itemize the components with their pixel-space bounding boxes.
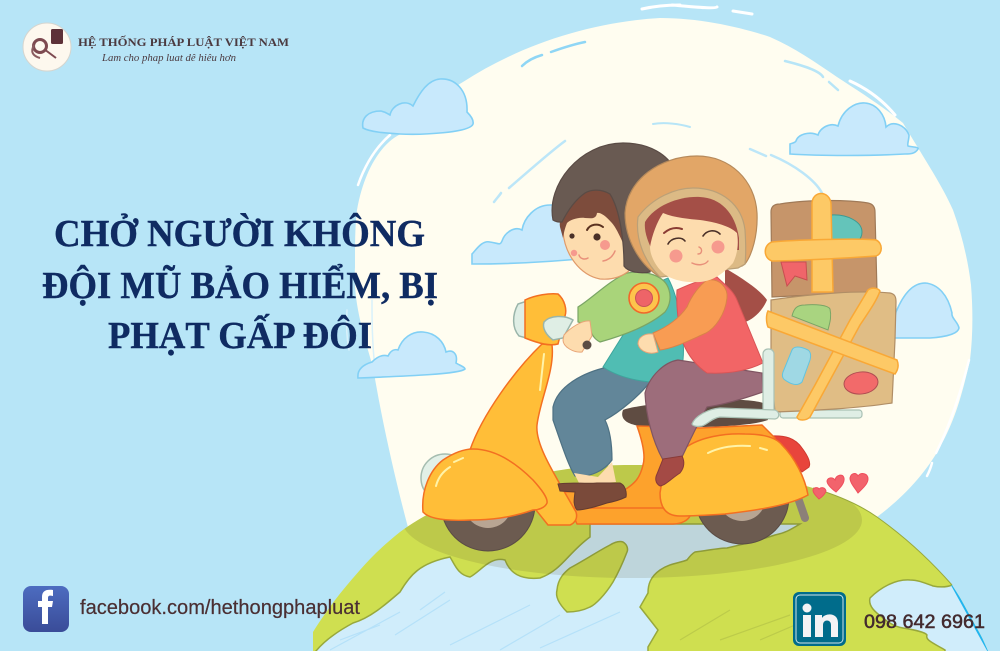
box rail — [780, 410, 862, 418]
title: PHẠT GẤP ĐÔI — [108, 314, 372, 357]
hair — [560, 186, 624, 245]
boot — [656, 456, 684, 486]
seat — [622, 400, 768, 427]
bottom box — [766, 288, 898, 420]
cloud: behind boxes — [890, 283, 959, 338]
eyes and mouth — [664, 228, 724, 265]
globe — [313, 465, 988, 651]
logo text — [78, 34, 289, 64]
jeans — [553, 367, 650, 476]
scooter front wheel — [441, 457, 535, 551]
male rider — [543, 143, 683, 510]
female rider — [625, 156, 763, 486]
scooter rear wheel — [695, 450, 789, 544]
logo badge — [23, 23, 71, 71]
cloud: behind rider — [472, 205, 590, 264]
title: CHỞ NGƯỜI KHÔNG — [54, 212, 425, 255]
cloud: lower left — [358, 332, 465, 378]
front mudguard — [421, 454, 469, 502]
headlight — [514, 294, 566, 345]
scooter highlights — [436, 354, 767, 486]
face — [650, 213, 738, 282]
logo text: Lam cho phap luat dê hiêu hơn — [101, 53, 236, 64]
green sleeve — [578, 272, 670, 342]
vest — [677, 277, 763, 373]
icon: linkedin — [793, 592, 846, 646]
scooter mid body — [563, 425, 775, 524]
moon — [355, 18, 972, 570]
scooter stand — [797, 495, 805, 518]
sleeve — [653, 280, 727, 350]
ankle — [574, 462, 616, 485]
scooter front shield — [470, 344, 577, 525]
handlebar — [543, 316, 573, 340]
title: ĐỘI MŨ BẢO HIỂM, BỊ — [42, 264, 438, 307]
rear fender — [660, 434, 808, 516]
logo text: HỆ THỐNG PHÁP LUẬT VIỆT NAM — [78, 34, 289, 49]
title — [42, 212, 438, 357]
helmet — [552, 143, 675, 273]
luggage rack — [692, 349, 779, 426]
helmet — [625, 156, 757, 277]
cloud: top left — [363, 79, 473, 134]
sky streaks — [347, 5, 969, 476]
teal shirt — [603, 278, 683, 382]
top box — [765, 194, 881, 297]
female rider hair back — [725, 268, 767, 322]
cloud: top right — [790, 103, 918, 156]
tail light — [770, 436, 810, 472]
hair — [645, 197, 739, 250]
icon: facebook — [23, 586, 69, 632]
pants — [645, 360, 763, 460]
globe rim — [813, 488, 952, 585]
hand — [563, 321, 592, 352]
phone number: 098 642 6961 — [864, 612, 985, 633]
sleeve badge — [629, 283, 659, 313]
helmet lining — [637, 188, 746, 277]
front fender — [423, 449, 547, 520]
face — [563, 205, 630, 279]
shoe — [558, 483, 626, 510]
hearts — [813, 474, 868, 499]
hand — [638, 334, 658, 353]
eyes and mouth — [569, 225, 615, 261]
facebook address: facebook.com/hethongphapluat — [80, 597, 360, 619]
